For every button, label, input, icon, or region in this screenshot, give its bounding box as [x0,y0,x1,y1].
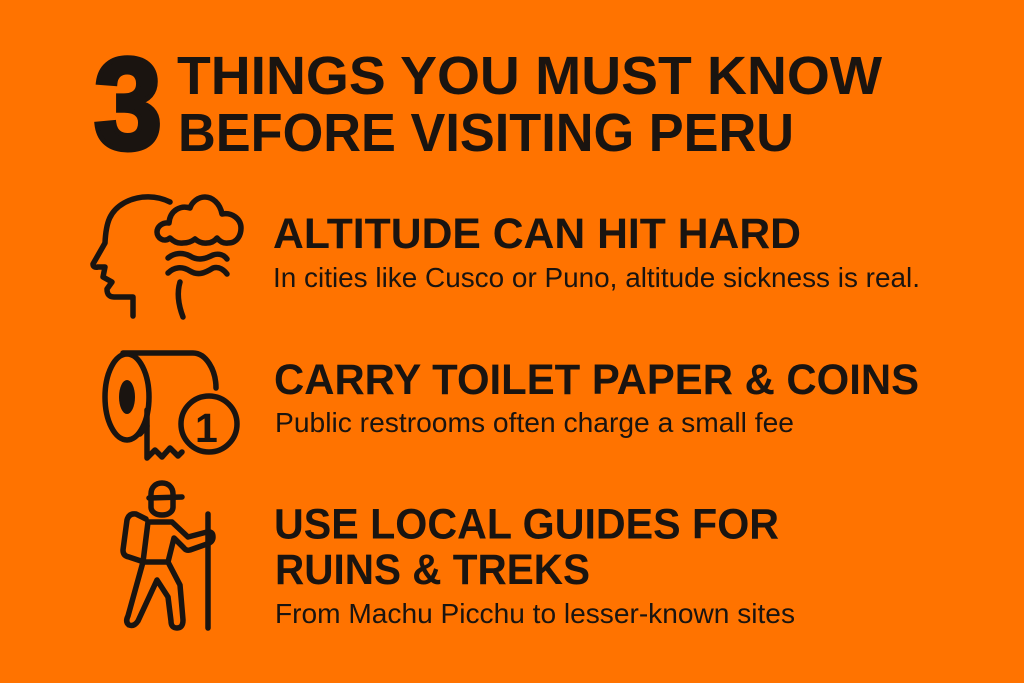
coin value: 1 [195,405,218,451]
heading: toilet paper: CARRY TOILET PAPER & COINS [274,356,919,404]
text: toilet paper detail: Public restrooms often charge a small fee [275,407,794,438]
title [94,30,882,176]
section: toilet paper [105,353,919,458]
text: guides detail: From Machu Picchu to lesser-known sites [275,598,795,629]
section: altitude [93,197,920,317]
section: guides [123,483,795,629]
heading: guides: RUINS & TREKS [275,546,590,594]
title line 2: BEFORE VISITING PERU [178,103,794,163]
title line 1: THINGS YOU MUST KNOW [177,46,882,106]
icon: hiker [123,483,213,628]
icon: toilet roll and coin [105,353,237,458]
heading: altitude: ALTITUDE CAN HIT HARD [273,210,801,258]
text: altitude detail: In cities like Cusco or Puno, altitude sickness is real. [273,262,920,293]
heading: guides: USE LOCAL GUIDES FOR [274,500,779,548]
heading: guides [274,500,779,594]
title numeral 3: 3 [94,30,162,176]
icon: head with cloud [93,197,241,317]
